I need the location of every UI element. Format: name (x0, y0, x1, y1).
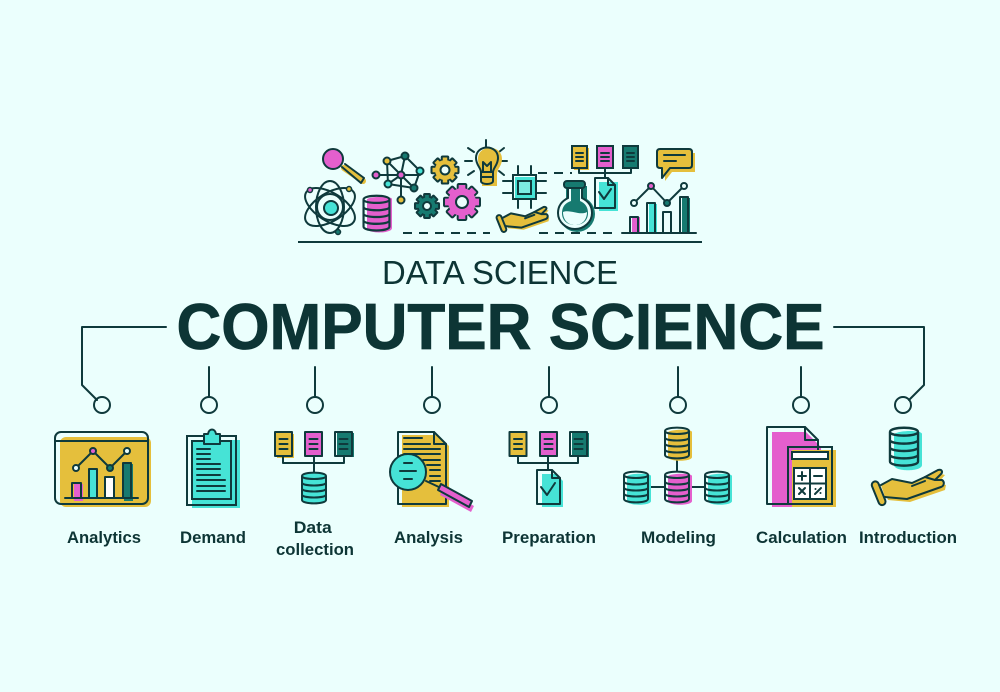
label: Demand: Demand (180, 529, 246, 547)
top illustration: data science icon cluster (299, 140, 696, 234)
connector: Analysis (424, 367, 440, 413)
icon: network graph (372, 152, 424, 204)
dashed connector: right baseline (539, 232, 614, 234)
document: check mark (595, 178, 618, 211)
icon: atom (299, 180, 361, 234)
label: Introduction: Introduction (859, 529, 957, 547)
label: Calculation: Calculation (756, 529, 847, 547)
label: Analysis: Analysis (394, 529, 463, 547)
database: pink centre (665, 472, 692, 505)
icon: Analytics (55, 432, 151, 507)
document: pink (305, 432, 323, 457)
icon: light bulb (465, 140, 507, 186)
icon: hand holding chip (496, 207, 549, 233)
icon: speech bubble (657, 149, 695, 181)
icon: pink database (364, 196, 392, 232)
connector: Modeling (670, 367, 686, 413)
document: dark teal (570, 432, 589, 457)
icon: Calculation (767, 427, 836, 507)
connector: Demand (201, 367, 217, 413)
label: Analytics: Analytics (67, 529, 141, 547)
title: COMPUTER SCIENCE (176, 290, 824, 363)
connector: Data collection (307, 367, 323, 413)
icon: pink gear (444, 184, 480, 220)
label: Data collection: collection (276, 541, 354, 559)
database: teal (890, 428, 922, 470)
document: yellow (510, 432, 528, 457)
document: check mark (537, 470, 563, 507)
icon: Demand clipboard (187, 430, 240, 508)
database: yellow (665, 428, 692, 461)
icon: Data collection (275, 432, 354, 504)
document: pink (597, 146, 613, 168)
label: Preparation: Preparation (502, 529, 596, 547)
icon: document flow (572, 146, 638, 211)
connector: title to Introduction (834, 327, 924, 413)
dashed connector: chip to documents (538, 172, 572, 174)
hand (871, 470, 946, 506)
database: teal (302, 473, 326, 504)
dashed connector: left baseline (403, 232, 490, 234)
document: dark teal (623, 146, 638, 168)
icon: flask (558, 181, 595, 232)
label: Data collection: Data (294, 519, 333, 537)
connector: title to Analytics (82, 327, 166, 413)
document: pink (540, 432, 558, 457)
document: yellow (572, 146, 589, 170)
icon: Analysis (390, 432, 474, 512)
icon: dark gear (415, 194, 439, 218)
icon: bar and line chart (622, 183, 696, 234)
database: teal left (624, 472, 651, 505)
document: yellow (275, 432, 294, 458)
icon: Preparation (510, 432, 589, 507)
icon: yellow gear (432, 156, 458, 184)
icon: magnifying glass (323, 149, 364, 183)
subtitle: DATA SCIENCE (382, 254, 618, 291)
database: teal right (705, 472, 732, 505)
label: Modeling: Modeling (641, 529, 716, 547)
baseline under illustration (298, 241, 702, 243)
connector: Calculation (793, 367, 809, 413)
icon: Modeling (624, 428, 732, 505)
connector: Preparation (541, 367, 557, 413)
icon: Introduction (871, 428, 946, 506)
icon: microchip (503, 166, 546, 208)
document: dark teal (335, 432, 354, 457)
